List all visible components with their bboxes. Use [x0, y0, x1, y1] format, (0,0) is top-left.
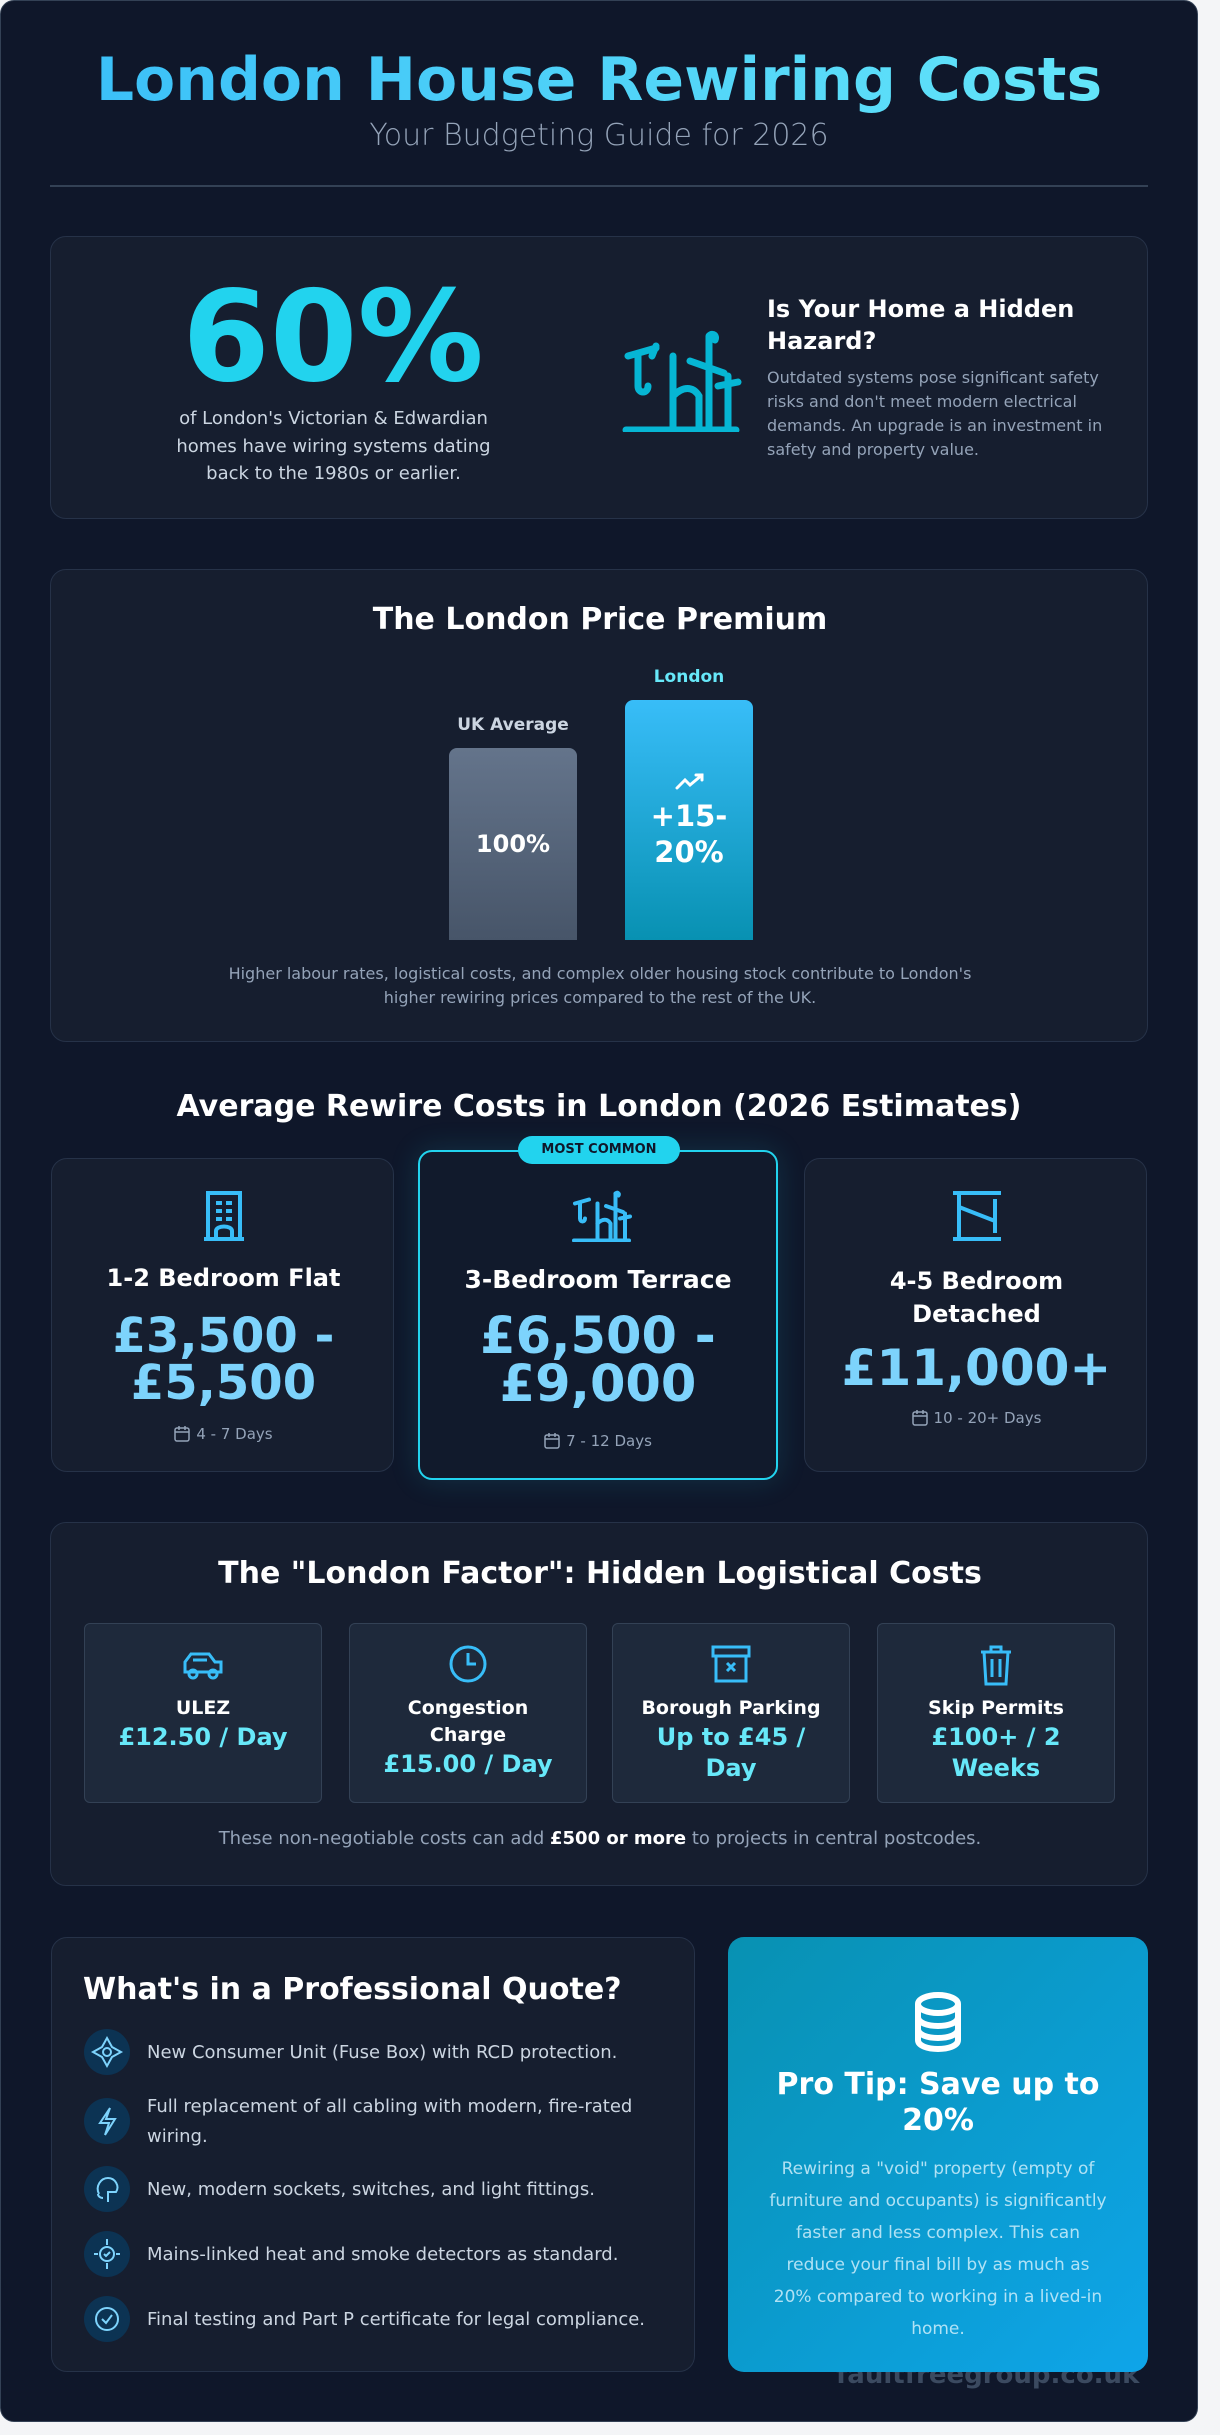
icon: parking archive — [712, 1646, 750, 1682]
title: Detached — [912, 1300, 1041, 1328]
panel: hazard stat — [50, 236, 1148, 519]
icon: car — [184, 1652, 222, 1680]
heading: The London Price Premium — [373, 602, 827, 637]
UK label: UK Average — [457, 715, 569, 735]
caption: Higher labour rates, logistical costs, and complex older housing stock contribute to London's higher rewiring prices compared to the rest of the UK. — [229, 964, 971, 1007]
card: flat — [51, 1158, 394, 1472]
icon: terrace — [572, 1190, 632, 1242]
box: parking: Borough Parking — [641, 1697, 821, 1719]
icon: house frame — [953, 1191, 1001, 1241]
item: consumer unit — [84, 2029, 617, 2075]
London bar: 20% — [654, 835, 724, 869]
heading: The "London Factor": Hidden Logistical Costs — [218, 1556, 982, 1591]
box: ULEZ: £12.50 / Day — [118, 1723, 288, 1751]
box: parking — [612, 1623, 850, 1803]
London bar: +15- — [651, 799, 727, 833]
hazard paragraph: Outdated systems pose significant safety risks and don't meet modern electrical demands. An upgrade is an investment in safety and property value. — [767, 368, 1102, 459]
icon: bin — [981, 1646, 1011, 1686]
box: congestion: £15.00 / Day — [383, 1750, 553, 1778]
title — [890, 1267, 1063, 1328]
icon: check — [84, 2296, 130, 2342]
price: £3,500 - — [113, 1308, 334, 1364]
footer note: These non-negotiable costs can add £500 or more to projects in central postcodes. — [219, 1828, 981, 1849]
box: congestion: Congestion — [408, 1697, 528, 1719]
panel: London factor — [50, 1522, 1148, 1886]
icon: detector — [84, 2231, 130, 2277]
panel: professional quote — [51, 1937, 695, 2372]
box: skip: Weeks — [952, 1754, 1040, 1782]
icon: building — [204, 1191, 244, 1241]
box: parking: Day — [705, 1754, 757, 1782]
box: congestion — [349, 1623, 587, 1803]
box: skip — [877, 1623, 1115, 1803]
item: detectors — [84, 2231, 618, 2277]
icon: clock — [450, 1646, 486, 1682]
badge — [518, 1136, 680, 1164]
item: cabling: Full replacement of all cabling with modern, fire-rated — [147, 2096, 632, 2117]
title: Pro Tip: Save up to 20% — [777, 2067, 1099, 2138]
big stat 60%: 60% — [182, 263, 484, 410]
box: skip: £100+ / 2 — [931, 1723, 1061, 1751]
box: parking: Up to £45 / — [657, 1723, 805, 1751]
icon: fuse — [84, 2029, 130, 2075]
price — [480, 1307, 716, 1414]
stat caption: of London's Victorian & Edwardian homes have wiring systems dating back to the 1980s or earlier. — [176, 408, 491, 484]
item: cabling — [84, 2096, 632, 2147]
item: consumer unit: New Consumer Unit (Fuse Box) with RCD protection. — [147, 2042, 617, 2063]
title: 4-5 Bedroom — [890, 1267, 1063, 1295]
price: £11,000+ — [842, 1339, 1111, 1397]
box: congestion: Charge — [430, 1724, 506, 1746]
price: £6,500 - — [480, 1307, 716, 1366]
icon: trend — [675, 773, 704, 790]
item: sockets: New, modern sockets, switches, and light fittings. — [147, 2179, 595, 2200]
panel: pro tip — [728, 1937, 1148, 2372]
heading: average costs: Average Rewire Costs in London (2026 Estimates) — [177, 1089, 1021, 1124]
card: terrace (most common) — [418, 1150, 778, 1480]
watermark: faultfreegroup.co.uk — [836, 2360, 1139, 2390]
heading: hidden hazard: Is Your Home a Hidden Hazard? — [767, 295, 1074, 355]
icon: bolt — [84, 2098, 130, 2144]
London label: London — [654, 667, 724, 687]
bar chart — [449, 667, 753, 940]
price — [113, 1308, 334, 1411]
badge: MOST COMMON — [541, 1142, 657, 1157]
paragraph: Rewiring a "void" property (empty of furniture and occupants) is significantly faster and less complex. This can reduce your final bill by as much as 20% compared to working in a lived-in home. — [769, 2159, 1107, 2339]
icon: hazard — [622, 330, 742, 432]
icon: coins — [915, 1992, 961, 2052]
duration: 4 - 7 Days — [196, 1425, 273, 1443]
item: detectors: Mains-linked heat and smoke detectors as standard. — [147, 2244, 618, 2265]
box: ULEZ — [84, 1623, 322, 1803]
UK bar: 100% — [476, 830, 550, 858]
heading: What's in a Professional Quote? — [83, 1972, 622, 2007]
title: London House Rewiring Costs — [96, 45, 1102, 115]
duration: 10 - 20+ Days — [934, 1409, 1041, 1427]
UK bar — [449, 748, 577, 940]
title: 3-Bedroom Terrace — [464, 1265, 732, 1294]
item: sockets — [84, 2166, 595, 2212]
London bar — [625, 700, 753, 940]
subtitle: Your Budgeting Guide for 2026 — [369, 118, 829, 153]
item: cabling: wiring. — [147, 2126, 208, 2147]
box: skip: Skip Permits — [928, 1697, 1064, 1719]
card: detached — [804, 1158, 1147, 1472]
duration: 7 - 12 Days — [566, 1432, 652, 1450]
title: 1-2 Bedroom Flat — [107, 1264, 340, 1292]
panel: price premium — [50, 569, 1148, 1042]
box: ULEZ: ULEZ — [176, 1697, 230, 1719]
price: £5,500 — [131, 1355, 316, 1411]
item: testing: Final testing and Part P certificate for legal compliance. — [147, 2309, 645, 2330]
item: testing — [84, 2296, 645, 2342]
price: £9,000 — [500, 1355, 696, 1414]
icon: plug — [84, 2166, 130, 2212]
